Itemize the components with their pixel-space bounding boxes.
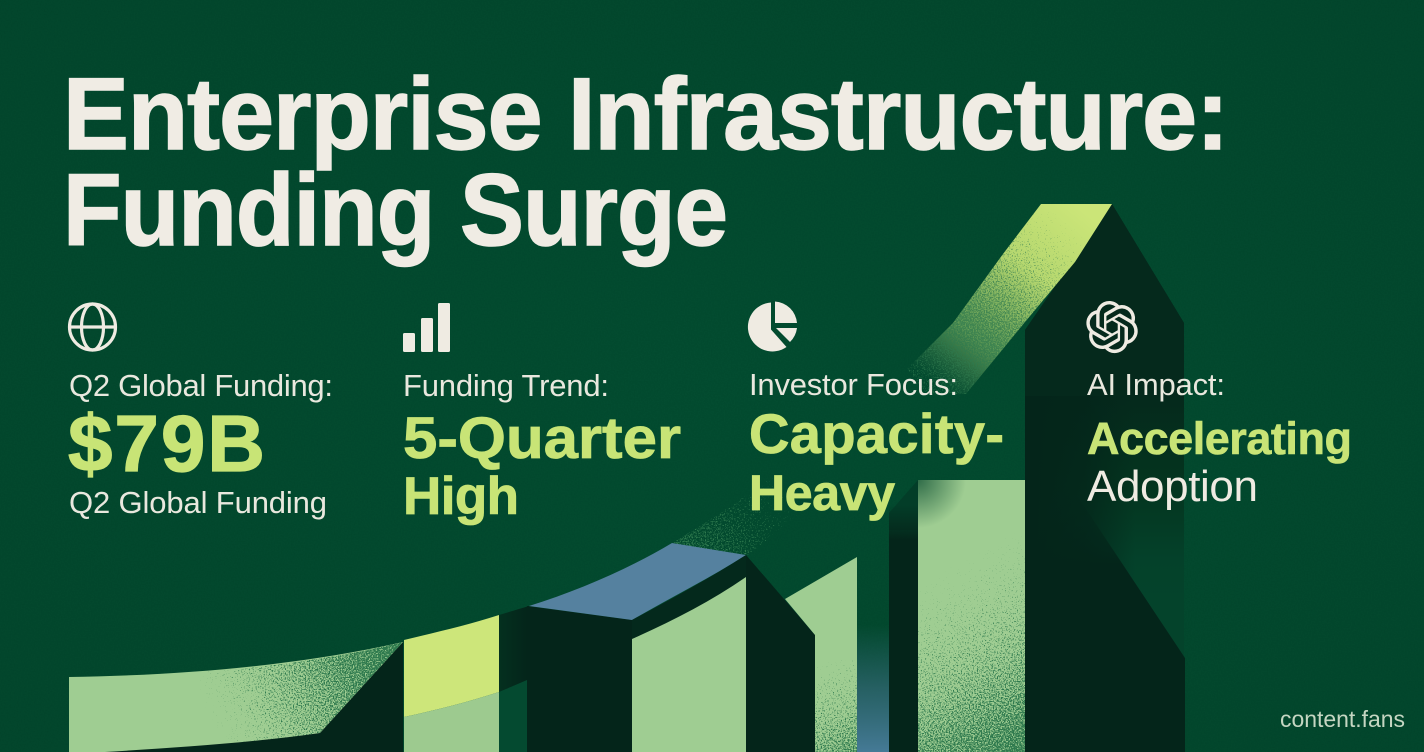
value: Capacity- (749, 402, 1004, 465)
icon: globe (70, 304, 116, 350)
value second line: Adoption (1087, 462, 1258, 511)
value second line: Heavy (749, 465, 895, 521)
blue cap on the third column (529, 543, 746, 620)
panel: funding trend (403, 303, 681, 526)
tall light green bar with shadow column (889, 480, 1025, 752)
rising bar chart illustration (69, 204, 1185, 752)
label: Funding Trend: (403, 368, 609, 403)
icon: bar chart (403, 303, 450, 352)
value: Accelerating (1087, 413, 1352, 464)
dark third column (527, 606, 632, 752)
value: $79B (68, 399, 265, 488)
blue strip (857, 625, 889, 752)
label: Q2 Global Funding: (69, 368, 333, 403)
panel: investor focus (748, 302, 1004, 521)
ribbon rising to the peak (672, 204, 1112, 556)
first light green band (69, 642, 403, 752)
icon: AI knot (1086, 301, 1138, 353)
watermark: content.fans (1280, 706, 1405, 732)
yellow and green second bar (404, 615, 499, 752)
dark fifth column (746, 555, 815, 752)
caption: Q2 Global Funding (69, 485, 327, 520)
gap shadow between bars (499, 606, 529, 752)
slanted light green bar (785, 557, 857, 752)
icon: pie chart (748, 302, 797, 351)
panel: AI impact (1086, 301, 1352, 511)
label: AI Impact: (1087, 367, 1225, 402)
title (63, 57, 1228, 267)
title: Funding Surge (63, 153, 727, 267)
label: Investor Focus: (749, 367, 958, 402)
panel: Q2 global funding (68, 304, 333, 520)
main tall dark column (1025, 204, 1185, 752)
value second line: High (403, 467, 519, 526)
light green fourth bar (632, 555, 746, 752)
title: Enterprise Infrastructure: (63, 57, 1228, 171)
value: 5-Quarter (403, 406, 681, 471)
